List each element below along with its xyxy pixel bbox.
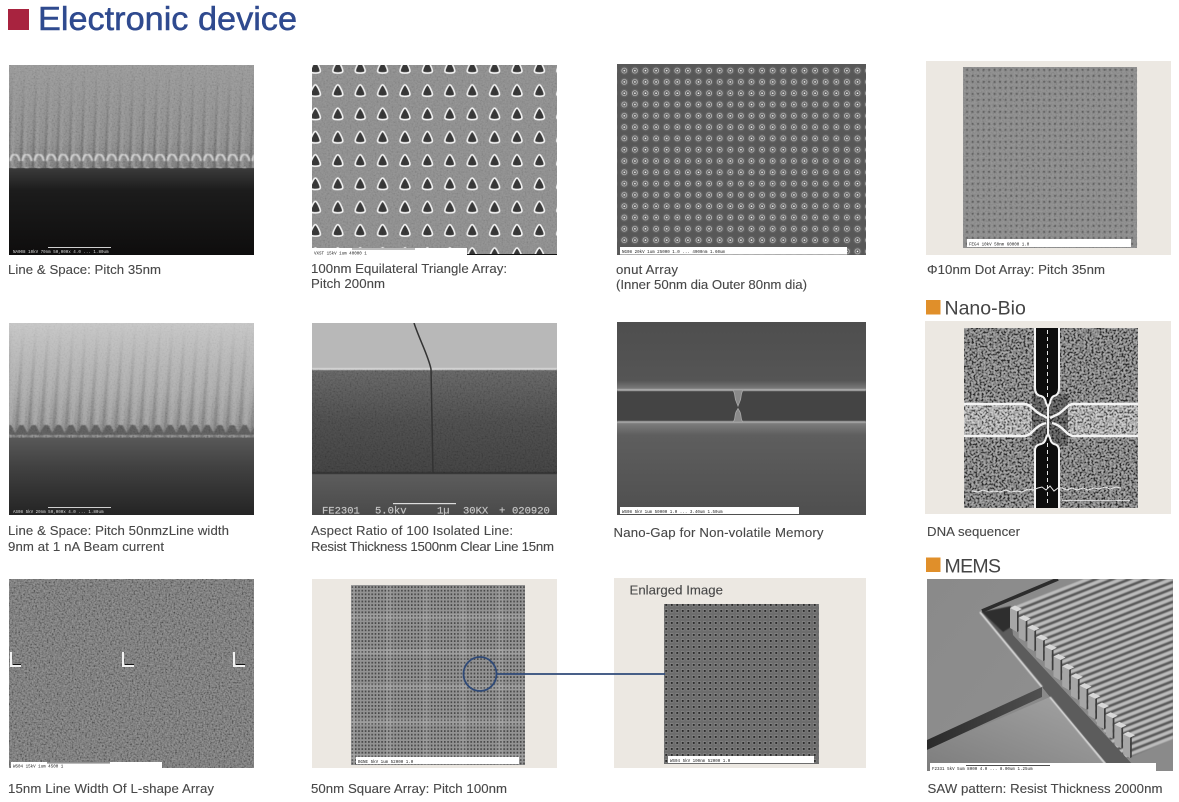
SEM data label: 30KX	[463, 506, 489, 518]
caption: donut array	[616, 262, 807, 292]
icon: crimson square	[8, 9, 29, 30]
panel: enlarged image	[614, 578, 866, 768]
SEM data label: +	[499, 506, 505, 518]
vertical channel top	[1035, 326, 1059, 407]
section heading: Electronic device	[8, 1, 297, 38]
upper slab	[927, 579, 1058, 740]
panel: line and space 50nm	[9, 323, 254, 515]
scale strip	[620, 247, 847, 254]
caption: line and space 50nm	[8, 523, 229, 554]
scale strip	[11, 762, 162, 768]
horizontal electrodes	[964, 404, 1047, 436]
caption: nano-gap: Nano-Gap for Non-volatile Memory	[614, 525, 824, 540]
caption: line and space 50nm: 9nm at 1 nA Beam current	[8, 539, 164, 554]
caption: triangle array: 100nm Equilateral Triangle Array:	[311, 261, 507, 276]
SEM data label: 1µ	[437, 506, 450, 518]
panel: triangle array: VXST 15kV 1um 40000 1	[314, 252, 367, 256]
panel: SAW pattern	[927, 579, 1173, 772]
panel: isolated line	[312, 323, 557, 518]
gap neck upper	[733, 390, 743, 406]
groove	[927, 687, 1042, 750]
trench floor	[980, 608, 1133, 771]
icon: orange square	[926, 300, 940, 314]
panel: L-shape array	[9, 579, 254, 770]
panel: square array	[312, 579, 557, 768]
scale strip	[620, 507, 799, 514]
panel: line and space 50nm: AS08 5kV 20nm 50,000x 4.0 ... 1.80um	[13, 510, 104, 515]
title text: Electronic device	[38, 1, 297, 38]
panel: donut array: NG08 20kV 1um 25000 1.0 ... 4900nm 1.60um	[622, 250, 726, 255]
caption: SAW pattern: SAW pattern: Resist Thickness 2000nm	[928, 781, 1162, 796]
caption: line and space 35nm: Line & Space: Pitch 35nm	[8, 262, 161, 277]
scale strip	[356, 757, 519, 764]
caption: square array: 50nm Square Array: Pitch 100nm	[311, 781, 507, 796]
caption: donut array: (Inner 50nm dia Outer 80nm dia)	[616, 277, 807, 292]
L marks	[11, 652, 245, 666]
icon: orange square	[926, 558, 940, 572]
caption: isolated line	[311, 523, 554, 554]
scale strip	[312, 248, 467, 256]
comb teeth	[1010, 606, 1135, 758]
caption: L-shape array: 15nm Line Width Of L-shape Array	[8, 781, 214, 796]
panel: dot array	[926, 61, 1171, 255]
scale strip	[967, 239, 1131, 247]
caption: triangle array: Pitch 200nm	[311, 276, 385, 291]
panel: triangle array	[312, 65, 557, 256]
SEM data label: 5.0kv	[375, 506, 407, 518]
inset label: Enlarged Image	[630, 582, 723, 598]
panel: line and space pitch 35nm: NA008 10kV 70nm 50,000x 4.0 ... 1.80um	[13, 250, 109, 255]
panel: square array: BGNE 5kV 1um 52000 1.0	[358, 760, 414, 765]
panel: line and space pitch 35nm	[9, 65, 254, 255]
caption: dot array: Φ10nm Dot Array: Pitch 35nm	[927, 262, 1105, 277]
vertical channel bottom	[1035, 434, 1059, 510]
panel: nano-gap	[617, 322, 866, 515]
panel: dot array: FEG4 10kV 50nm 60000 1.0	[969, 242, 1030, 248]
callout: magnifier circle and connector line	[464, 657, 665, 691]
noise trace	[972, 486, 1121, 492]
comb fingers	[1010, 579, 1173, 759]
gap neck lower	[733, 408, 743, 422]
panel: enlarged image: WS04 5kV 100nm 52000 1.0	[670, 759, 731, 764]
lower slab	[927, 697, 1113, 771]
panel: SAW pattern: F2331 5kV 5um 8000 4.0 ... 8.00um 1.25um	[932, 767, 1033, 772]
caption: isolated line: Aspect Ratio of 100 Isolated Line:	[311, 523, 513, 538]
caption: isolated line: Resist Thickness 1500nm Clear Line 15nm	[311, 539, 554, 554]
panel: DNA sequencer	[925, 321, 1171, 514]
SEM data label: 020920	[512, 506, 550, 518]
scale strip	[668, 756, 814, 763]
caption: DNA sequencer: DNA sequencer	[927, 524, 1021, 539]
heading: MEMS: MEMS	[944, 556, 1001, 578]
scale strip	[930, 763, 1156, 771]
caption: triangle array	[311, 261, 507, 291]
panel: L-shape array: WS04 15kV 1um 4500 1	[13, 764, 64, 770]
SEM data label: FE2301	[322, 506, 360, 518]
panel: donut array	[617, 64, 866, 255]
caption: line and space 50nm: Line & Space: Pitch 50nmzLine width	[8, 523, 229, 538]
panel: nano-gap: WS08 5kV 1um 50000 1.0 ... 3.40um 1.50um	[622, 510, 723, 515]
caption: donut array: onut Array	[616, 262, 678, 277]
heading: Nano-Bio: Nano-Bio	[944, 298, 1026, 320]
